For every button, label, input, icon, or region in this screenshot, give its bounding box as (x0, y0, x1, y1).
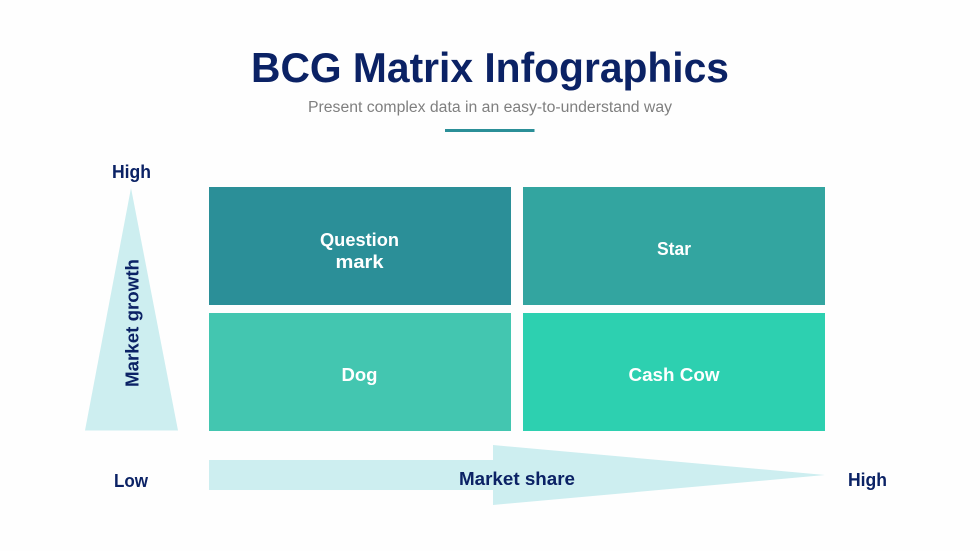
high label for growth axis: High (112, 162, 151, 182)
panel: market share axis (209, 445, 887, 505)
panel: question mark quadrant (209, 187, 511, 305)
arrow: market share (209, 445, 825, 505)
market growth label: Market growth (122, 259, 142, 387)
panel: market growth axis (85, 162, 178, 491)
cash cow label: Cash Cow (628, 364, 720, 385)
high label for share axis: High (848, 470, 887, 490)
dog label: Dog (342, 364, 378, 385)
panel: dog quadrant (209, 313, 511, 431)
title: BCG Matrix Infographics (251, 44, 729, 91)
panel: cash cow quadrant (523, 313, 825, 431)
low label for growth axis: Low (114, 471, 149, 491)
subtitle: Present complex data in an easy-to-understand way (308, 99, 672, 116)
market growth triangle (85, 188, 178, 430)
panel: question mark quadrant: mark (336, 251, 384, 272)
panel: star quadrant (523, 187, 825, 305)
question mark label: Question (320, 229, 399, 250)
market share label: Market share (459, 469, 575, 489)
title divider (445, 129, 534, 132)
star label: Star (657, 238, 691, 259)
